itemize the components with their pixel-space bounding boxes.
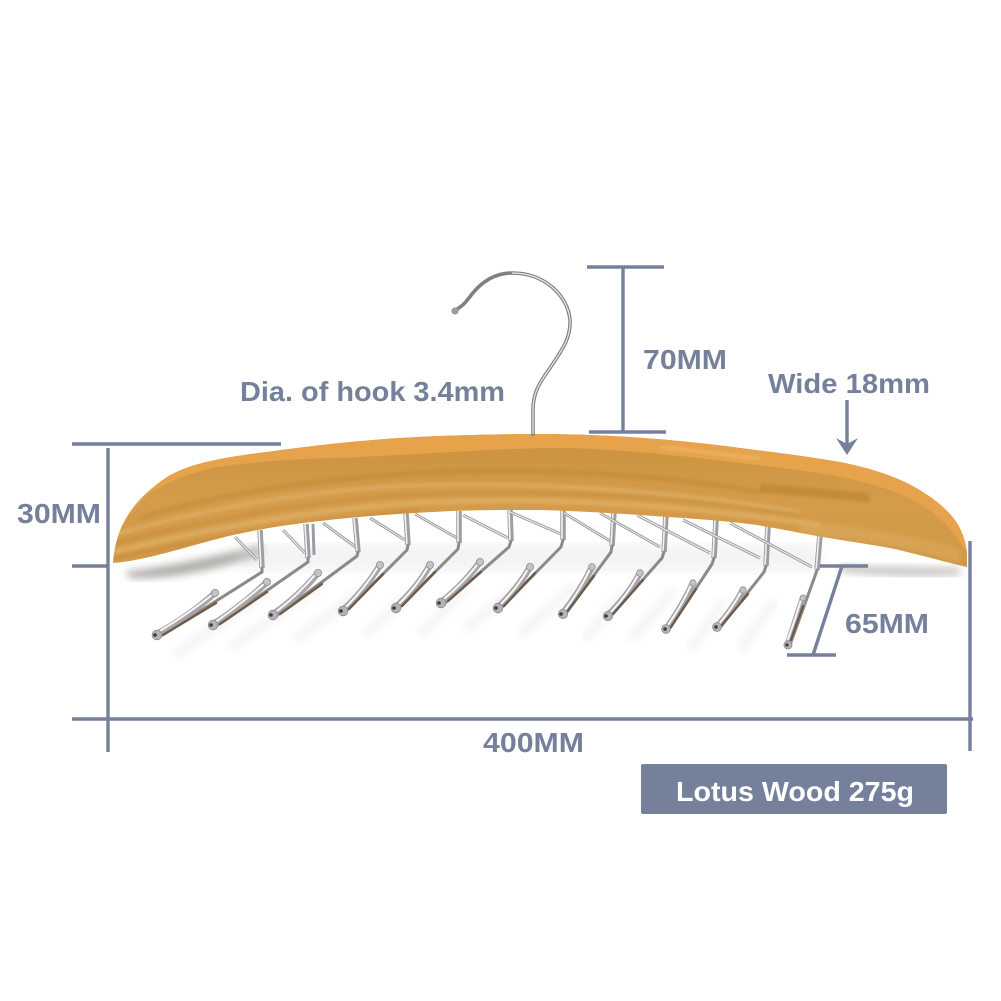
hook: tie hook 8 [558, 511, 614, 619]
hook: tie hook 10 [637, 515, 716, 633]
badge: material and weight: Lotus Wood 275g [676, 776, 914, 807]
hanger shadows [125, 545, 960, 655]
hook: tie hook 7 [493, 510, 563, 613]
label: 70MM: 70MM [643, 344, 727, 375]
dimension: arm length 65MM [787, 566, 868, 655]
hook: tie hook 9 [600, 513, 666, 621]
label: 30MM: 30MM [17, 498, 101, 529]
hook: tie hook 4 [338, 513, 408, 616]
hanger wooden body [113, 434, 967, 567]
label: 400MM: 400MM [483, 727, 584, 758]
wood grain [113, 471, 960, 558]
hook: tie hook 1 [152, 530, 262, 640]
arrow: width pointer [836, 400, 858, 455]
hanger metal hook [451, 273, 570, 434]
label: width: Wide 18mm [768, 368, 930, 399]
hook: tie hook 12 [730, 523, 820, 649]
dimension: thickness 30MM [72, 444, 281, 566]
hook: tie hook 2 [208, 524, 314, 630]
hook: tie hook 5 [391, 511, 459, 613]
label: 65MM: 65MM [845, 608, 929, 639]
hook: tie hook 6 [436, 510, 511, 608]
hook: tie hook 11 [683, 520, 768, 631]
dimension: hook height 70MM [587, 267, 666, 432]
top bevel [120, 434, 967, 552]
badge: material and weight [641, 764, 947, 814]
dimension: total width 400MM [72, 448, 973, 752]
hook: tie hook 3 [268, 518, 358, 620]
label: hook diameter: Dia. of hook 3.4mm [240, 376, 505, 407]
